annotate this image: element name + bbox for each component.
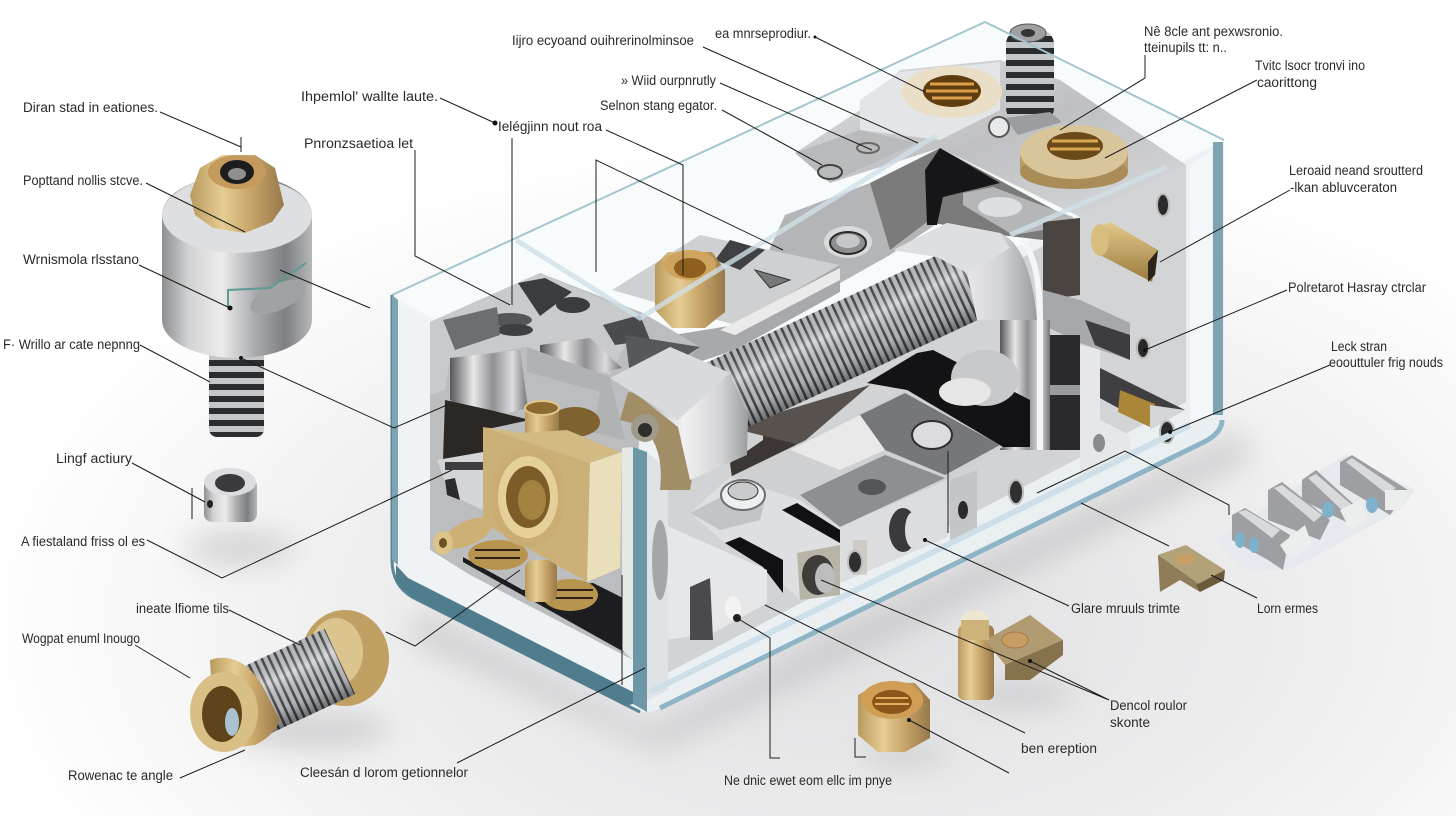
dark column upper [1043, 218, 1080, 300]
leader: Wrnismola [139, 265, 230, 308]
part: brass L bracket [958, 610, 1063, 700]
leader: Polretarot [1145, 290, 1287, 350]
leader: Wogpat [135, 645, 190, 678]
leader: screw to box [241, 358, 447, 428]
label: Selnon stang egator. [600, 98, 717, 113]
label: Tvitc lsocr tronvi ino [1255, 58, 1365, 73]
leader: Ielegjinn vertical [511, 138, 513, 305]
right wall base [647, 165, 1186, 682]
front glass strip [622, 447, 633, 660]
label: Wogpat enuml Inougo [22, 631, 140, 646]
right wall upper [1040, 165, 1186, 478]
left glass edge [392, 295, 640, 712]
leader: Lorn [1211, 575, 1257, 598]
label: Iijro ecyoand ouihrerinolminsoe [512, 33, 694, 48]
label: -lkan abluvceraton [1290, 180, 1397, 195]
lower silver plate [690, 477, 843, 600]
brass top fittings [525, 401, 600, 445]
front collar [210, 658, 280, 750]
left interior wall [430, 273, 700, 660]
label: » Wiid ourpnrutly [621, 73, 716, 88]
brass nut top right [1020, 125, 1128, 189]
coil [241, 629, 355, 733]
mid block under plate [735, 183, 935, 325]
post [797, 545, 840, 600]
right chrome column [1000, 320, 1050, 450]
dark recess upper [870, 148, 1073, 250]
label: skonte [1110, 715, 1150, 730]
brass block [483, 427, 622, 582]
brass plug right [1091, 222, 1158, 282]
lower white block [665, 525, 767, 640]
silver band [527, 347, 625, 440]
label: Cleesán d lorom getionnelor [300, 765, 468, 780]
front block [840, 480, 948, 582]
leader: Rowenac [180, 750, 245, 778]
coil springs at tray [468, 540, 598, 611]
leader: Popttand [146, 183, 245, 232]
glass right of strip [647, 452, 668, 700]
label: Wrnismola rlsstano [23, 252, 139, 267]
chrome blob [951, 350, 1019, 406]
main glass enclosure [392, 22, 1224, 712]
leader: Pnronz [415, 150, 510, 305]
leader end dots [228, 36, 1172, 722]
label: Leroaid neand sroutterd [1289, 163, 1423, 178]
label: tteinupils tt: n.. [1144, 40, 1227, 55]
leader: Iijro [703, 47, 918, 143]
ring washer [824, 226, 872, 258]
label: eoouttuler frig nouds [1329, 355, 1443, 370]
cylinder top face [162, 177, 312, 253]
silver cuff left [610, 347, 748, 480]
leader: nut [909, 720, 1009, 773]
right dark column [1050, 335, 1080, 450]
rear flange [301, 610, 389, 706]
label: Popttand nollis stcve. [23, 173, 143, 188]
right wall rod slot [1043, 290, 1130, 360]
top metal plate [795, 60, 1186, 217]
label: Leck stran [1331, 339, 1387, 354]
leader: spool to box [386, 570, 520, 646]
label: ineate lfiome tils [136, 601, 229, 616]
label: F· Wrillo ar cate nepnng [3, 337, 140, 352]
label: Nê 8cle ant pexwsronio. [1144, 24, 1283, 39]
lower wall slot [1098, 367, 1185, 427]
leader: ineate [229, 610, 300, 645]
leader: nut bracket [855, 738, 866, 757]
leader: Ielegjinn [606, 130, 683, 275]
brass nut on plate [655, 250, 725, 328]
part: small bushing [204, 468, 257, 522]
centre dark recess [867, 350, 1030, 447]
leader: vertical glass [621, 575, 623, 685]
label: Ihpemlol' wallte laute. [301, 89, 438, 104]
brass hex nut [190, 155, 284, 233]
main threaded rod [702, 244, 992, 434]
cylinder slot [245, 273, 311, 321]
leader: clips [1037, 451, 1229, 515]
leader: Ne 8cle [1060, 55, 1145, 130]
chrome coil left [450, 350, 528, 420]
left bracket arch [620, 392, 692, 490]
raised silver plate with nut [612, 235, 840, 325]
label: A fiestaland friss ol es [21, 534, 145, 549]
dark left patch [443, 400, 530, 460]
leader: Selnon [722, 110, 822, 165]
chrome coil right [540, 338, 622, 375]
leader: Ihpemlol [440, 98, 495, 123]
part: loose brass nut [858, 681, 930, 752]
glass edges [392, 22, 1224, 295]
leader lines [132, 36, 1330, 778]
cylinder body [162, 175, 312, 358]
leader: small block [1081, 503, 1169, 546]
label: Lorn ermes [1257, 601, 1318, 616]
part: row of metal clips [1215, 455, 1415, 570]
leader: Diran [160, 112, 241, 152]
glass floor [397, 302, 633, 700]
part: small brass block [1158, 545, 1225, 592]
lower dark tray [463, 557, 633, 657]
leader: centre vertical [947, 451, 949, 533]
glass shell [392, 22, 1224, 712]
part: left cylinder with nut [162, 155, 312, 437]
top glass pane [392, 22, 1224, 440]
label: ea mnrseprodiur. [715, 26, 811, 41]
leader: A fiestaland [147, 470, 452, 578]
leader: bracket [596, 160, 783, 272]
inner glass strips [516, 135, 1167, 318]
leader: Ne dnic [737, 618, 780, 758]
teal bottom edge [396, 565, 633, 706]
label: Dencol roulor [1110, 698, 1187, 713]
threaded screw [209, 345, 264, 437]
leader: Glare [925, 540, 1069, 606]
leader: Cleesan [457, 668, 645, 763]
leader: Leck [1170, 365, 1330, 432]
label: caorittong [1257, 75, 1317, 90]
shadows under parts [185, 430, 1250, 765]
leader: Wrillo [140, 345, 210, 382]
part: brass spool with coil [190, 610, 389, 752]
label: Rowenac te angle [68, 768, 173, 783]
leader: ben [765, 605, 1025, 733]
label: Diran stad in eationes. [23, 100, 158, 115]
threaded screw top [989, 24, 1062, 137]
label: Ne dnic ewet eom ellc im pnye [724, 773, 892, 788]
lens piece [963, 187, 1073, 235]
plate front edge [612, 265, 840, 375]
leader: Tvitc [1105, 80, 1257, 158]
top plate pale glazing [860, 62, 1000, 140]
leader: mnrseprodiur [815, 37, 925, 92]
chrome specks [437, 452, 483, 510]
label: Pnronzsaetioa let [304, 136, 413, 151]
wall white piece [1080, 345, 1130, 476]
label: ben ereption [1021, 741, 1097, 756]
black slots [782, 503, 840, 543]
label: Lingf actiury [56, 451, 132, 466]
label: Glare mruuls trimte [1071, 601, 1180, 616]
silver cuff right [893, 223, 1037, 320]
leader: Dencol [821, 580, 1109, 700]
right glass edge [1213, 142, 1223, 415]
clip plate [795, 130, 917, 183]
leader: cylinder right [280, 270, 370, 308]
label: Polretarot Hasray ctrclar [1288, 280, 1426, 295]
glass bend highlight [1022, 240, 1040, 450]
bottom right glass edge [660, 420, 1222, 708]
brass stem [525, 560, 557, 602]
brass ring top [902, 66, 1002, 118]
brushed plate [730, 390, 1003, 527]
wall screws [1157, 194, 1169, 216]
label: Ielégjinn nout roa [498, 119, 602, 134]
top bracket [430, 273, 640, 395]
leader: Leroaid [1160, 190, 1290, 262]
leader: Lingf [132, 463, 205, 519]
leader: Wiid [720, 83, 872, 150]
brass side fitting [433, 511, 498, 555]
